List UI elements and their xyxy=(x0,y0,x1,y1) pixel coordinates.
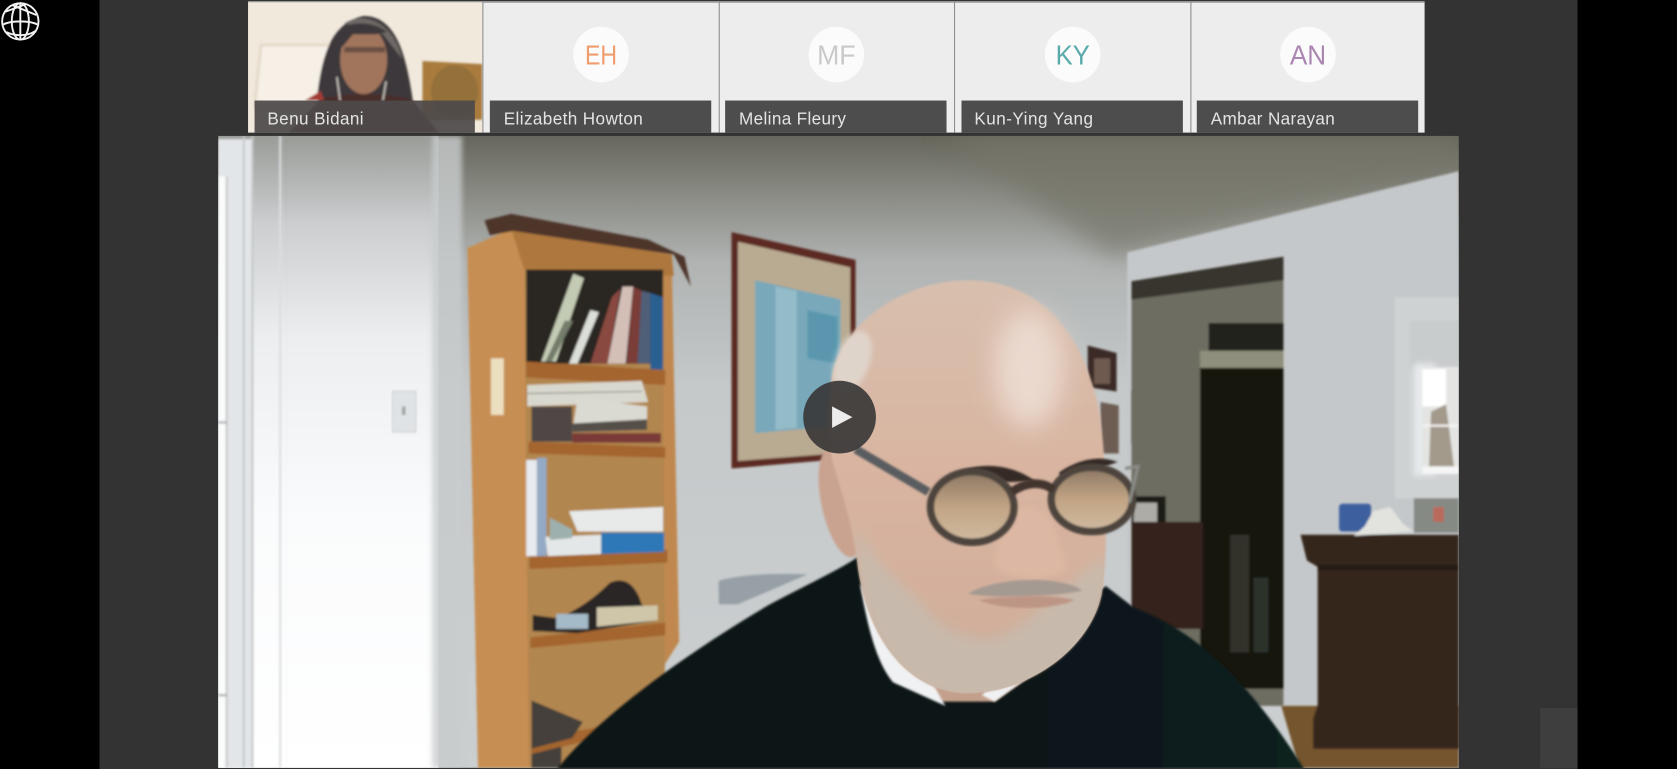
second shelf books xyxy=(527,381,661,443)
panel: main speaker video xyxy=(218,136,1459,769)
nose xyxy=(995,507,1067,579)
gray sofa back xyxy=(719,574,807,604)
doorway to next room xyxy=(1132,257,1283,706)
room walls xyxy=(218,136,1459,768)
papers on top of bookcase xyxy=(484,214,691,287)
name label: Benu Bidani: Benu Bidani xyxy=(267,110,364,129)
framed picture xyxy=(732,232,856,468)
sticky note xyxy=(491,358,504,415)
speaker: man with glasses xyxy=(556,280,1305,769)
avatar: AN: AN xyxy=(1290,40,1326,71)
name label: Melina Fleury xyxy=(725,101,947,133)
tile dividers xyxy=(483,2,1191,133)
lighter corner patch xyxy=(1540,708,1578,768)
avatar: KY xyxy=(1045,27,1101,82)
moustache xyxy=(968,580,1082,597)
name label: Kun-Ying Yang: Kun-Ying Yang xyxy=(974,110,1093,129)
bookcase xyxy=(467,214,691,768)
third shelf books and boxes xyxy=(526,458,664,556)
bottom shelf items xyxy=(532,701,583,768)
dresser with objects xyxy=(1301,498,1459,749)
avatar: MF: MF xyxy=(817,40,856,71)
avatar: MF xyxy=(809,27,864,82)
head xyxy=(829,280,1106,693)
name label: Benu Bidani xyxy=(255,101,475,133)
glasses xyxy=(856,449,1138,542)
avatar: KY: KY xyxy=(1056,40,1090,71)
shirt collar xyxy=(860,584,1027,706)
patio door at left xyxy=(218,136,280,768)
play button xyxy=(803,381,876,453)
panel: participant strip xyxy=(248,1,1425,133)
top shelf books xyxy=(526,270,663,370)
avatar: EH xyxy=(573,27,629,82)
wood floor xyxy=(1281,706,1459,768)
name label: Elizabeth Howton xyxy=(490,101,711,133)
name label: Elizabeth Howton: Elizabeth Howton xyxy=(504,110,643,129)
avatar: EH: EH xyxy=(585,40,617,71)
name label: Melina Fleury: Melina Fleury xyxy=(739,110,846,129)
light switch xyxy=(393,391,416,432)
beard xyxy=(856,546,1102,693)
name label: Ambar Narayan xyxy=(1197,101,1418,133)
window on right wall xyxy=(1395,297,1459,498)
fourth shelf cables xyxy=(533,580,658,633)
neck xyxy=(932,680,1028,704)
icon: World Bank globe logo xyxy=(2,3,39,40)
ear xyxy=(818,451,856,558)
mouth xyxy=(979,596,1075,608)
small wall pictures xyxy=(1086,344,1132,455)
name label: Kun-Ying Yang xyxy=(961,101,1183,133)
participant tile: Benu Bidani xyxy=(248,2,482,133)
eyebrows xyxy=(957,459,1118,483)
name label: Ambar Narayan: Ambar Narayan xyxy=(1211,110,1335,129)
avatar: AN xyxy=(1280,27,1336,82)
forehead highlight xyxy=(995,310,1063,428)
white hair tuft xyxy=(830,328,874,386)
sweater xyxy=(556,556,1305,769)
shelf boards xyxy=(526,362,667,754)
